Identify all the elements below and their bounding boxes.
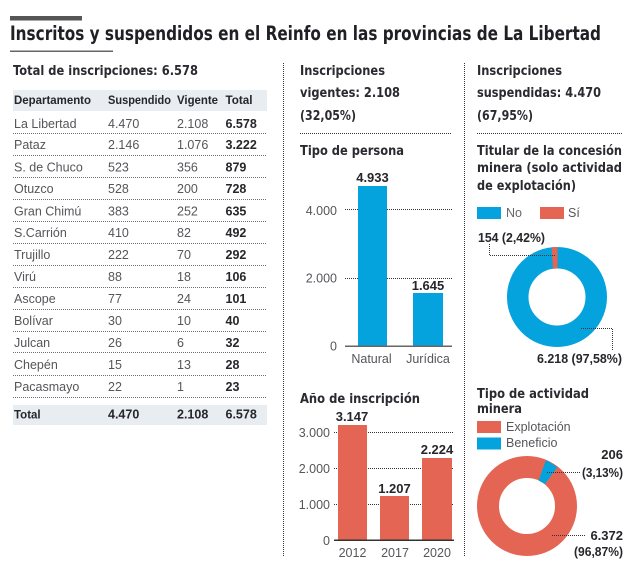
table rows: 32: [226, 336, 239, 350]
table rows: 26: [108, 336, 122, 350]
legend: [477, 206, 580, 220]
bar chart: tipo de persona: 1.645: [412, 278, 444, 293]
bar chart: año de inscripción: Año de inscripción: [300, 391, 420, 407]
table rows: Bolívar: [14, 314, 53, 328]
table rows: 82: [177, 226, 191, 240]
table rows: 88: [108, 270, 122, 284]
legend: Sí: [568, 206, 580, 220]
table rows: 10: [177, 314, 191, 328]
bar chart: año de inscripción: [299, 391, 454, 560]
bar: 2020: [422, 458, 452, 540]
table header row: Vigente: [177, 95, 218, 107]
donut ring: [488, 467, 566, 545]
table rows: S.Carrión: [14, 226, 67, 240]
table heading: Total de inscripciones: 6.578: [13, 63, 198, 79]
table header row: [13, 90, 267, 111]
table rows: 106: [226, 270, 246, 284]
bar chart: tipo de persona: 2.000: [306, 272, 337, 286]
table total row: 4.470: [108, 408, 139, 422]
donut chart: titular de la concesión minera: 6.218 (97,58%): [537, 352, 622, 366]
heading: active inscriptions: (32,05%): [300, 108, 356, 124]
table rows: 30: [108, 314, 122, 328]
table rows: Julcan: [14, 336, 50, 350]
table rows: 728: [226, 182, 246, 196]
table total row: Total: [14, 410, 41, 422]
table rows: 77: [108, 292, 122, 306]
table rows: [13, 117, 267, 398]
bar chart: año de inscripción: 2020: [423, 546, 451, 560]
table rows: 410: [108, 226, 129, 240]
bar chart: tipo de persona: Jurídica: [406, 352, 450, 366]
table rows: 635: [226, 204, 246, 218]
legend: [477, 420, 571, 450]
heading: suspended inscriptions: Inscripciones: [477, 63, 562, 79]
table rows: 13: [177, 358, 191, 372]
legend: No: [506, 206, 522, 220]
table rows: 879: [226, 160, 246, 174]
table rows: 6: [177, 336, 184, 350]
table rows: 383: [108, 204, 129, 218]
bar chart: tipo de persona: Tipo de persona: [300, 143, 404, 159]
bar chart: tipo de persona: [300, 143, 452, 366]
bar chart: año de inscripción: 2012: [339, 546, 366, 560]
table rows: 15: [108, 358, 122, 372]
table rows: 101: [226, 292, 246, 306]
bar chart: año de inscripción: 0: [323, 534, 330, 548]
table rows: Chepén: [14, 358, 58, 372]
table rows: Otuzco: [14, 182, 54, 196]
bar chart: año de inscripción: 1.207: [378, 481, 411, 496]
donut chart: tipo de actividad minera: minera: [477, 401, 522, 417]
table rows: 356: [177, 160, 198, 174]
table header row: Total: [226, 95, 252, 107]
table rows: 2.108: [177, 117, 208, 131]
table rows: 292: [226, 248, 246, 262]
heading: active inscriptions: [300, 63, 400, 124]
bar chart: año de inscripción: 3.000: [299, 426, 330, 440]
donut chart: tipo de actividad minera: Tipo de actividad: [477, 386, 589, 402]
donut chart: tipo de actividad minera: 6.372: [590, 528, 623, 543]
table rows: 528: [108, 182, 129, 196]
bar chart: año de inscripción: 3.147: [336, 409, 368, 424]
table total row: 2.108: [177, 408, 208, 422]
table rows: 24: [177, 292, 191, 306]
table rows: 6.578: [226, 117, 257, 131]
bar: 2012: [338, 425, 367, 540]
donut chart: tipo de actividad minera: 206: [601, 447, 623, 462]
title: [10, 16, 601, 52]
bar chart: tipo de persona: 4.000: [306, 204, 337, 218]
table rows: 28: [226, 358, 239, 372]
donut chart: titular de la concesión minera: de explotación): [477, 178, 576, 194]
table rows: 252: [177, 204, 198, 218]
table rows: Ascope: [14, 292, 56, 306]
table header row: Departamento: [14, 95, 91, 107]
bar chart: tipo de persona: 4.933: [356, 170, 389, 185]
bar chart: año de inscripción: 1.000: [299, 498, 330, 512]
table rows: 70: [177, 248, 191, 262]
table rows: 1.076: [177, 138, 208, 152]
table rows: 1: [177, 380, 184, 394]
donut ring: [518, 258, 596, 336]
table rows: 23: [226, 380, 239, 394]
donut chart: titular de la concesión minera: 154 (2,42%): [478, 231, 545, 245]
table rows: La Libertad: [14, 117, 77, 131]
table rows: 40: [226, 314, 239, 328]
bar: 2017: [380, 496, 409, 540]
table rows: S. de Chuco: [14, 160, 83, 174]
table total row: 6.578: [226, 408, 257, 422]
donut chart: tipo de actividad minera: (96,87%): [574, 545, 623, 559]
bar chart: año de inscripción: 2.000: [299, 462, 330, 476]
bar chart: año de inscripción: 2017: [381, 546, 409, 560]
panel: table of inscriptions: [13, 63, 267, 425]
heading: suspended inscriptions: suspendidas: 4.470: [477, 85, 601, 101]
table total row: [13, 405, 267, 425]
table rows: Pataz: [14, 138, 46, 152]
donut chart: tipo de actividad minera: (3,13%): [582, 466, 623, 480]
table rows: 523: [108, 160, 129, 174]
heading: suspended inscriptions: [477, 63, 601, 124]
heading: active inscriptions: Inscripciones: [300, 63, 385, 79]
bar chart: tipo de persona: 0: [330, 340, 337, 354]
table rows: 18: [177, 270, 191, 284]
table rows: 4.470: [108, 117, 139, 131]
bar chart: tipo de persona: Natural: [351, 352, 392, 366]
table rows: Trujillo: [14, 248, 50, 262]
bar: Jurídica: [413, 293, 443, 346]
table rows: 22: [108, 380, 122, 394]
table rows: Gran Chimú: [14, 204, 81, 218]
heading: suspended inscriptions: (67,95%): [477, 108, 533, 124]
table rows: 492: [226, 226, 246, 240]
table rows: 2.146: [108, 138, 139, 152]
table rows: 200: [177, 182, 198, 196]
table rows: 3.222: [226, 138, 257, 152]
donut chart: titular de la concesión minera: [477, 143, 622, 366]
legend: Beneficio: [506, 436, 557, 450]
table header row: Suspendido: [108, 95, 171, 107]
bar chart: año de inscripción: 2.224: [421, 442, 454, 457]
bar: Natural: [358, 186, 387, 346]
legend: Explotación: [506, 420, 571, 434]
table rows: Pacasmayo: [14, 380, 79, 394]
heading: active inscriptions: vigentes: 2.108: [300, 85, 400, 101]
table rows: Virú: [14, 270, 36, 284]
table rows: 222: [108, 248, 129, 262]
donut chart: tipo de actividad minera: [477, 386, 623, 559]
